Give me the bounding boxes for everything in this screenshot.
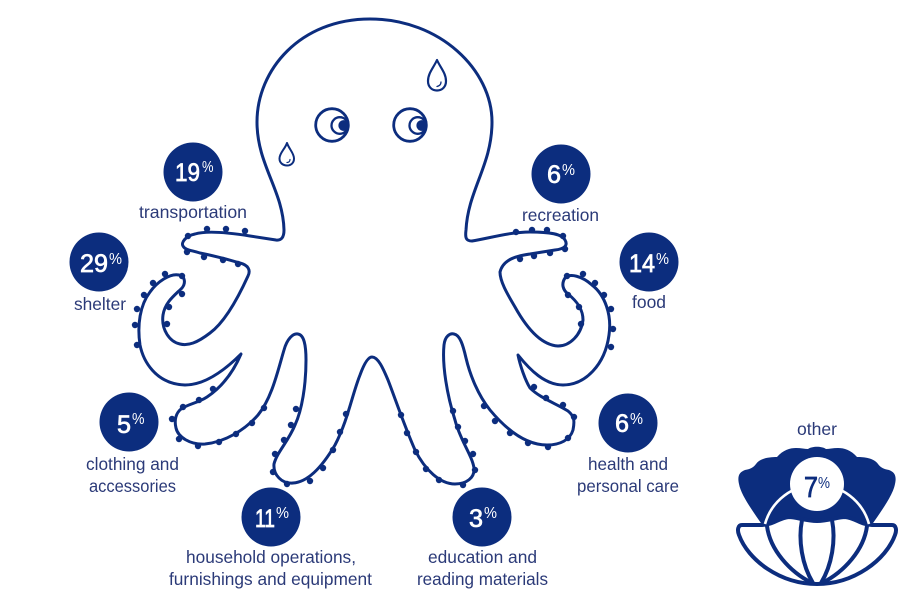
stat: education and reading materials 3% <box>417 488 548 589</box>
stat: household operations 11%: household operations, <box>186 547 356 567</box>
stat: shelter 29% <box>70 232 128 314</box>
octopus illustration <box>132 19 616 488</box>
stat: education and reading materials 3%: reading materials <box>417 569 548 589</box>
stat: food 14%: food <box>632 292 666 312</box>
icon: upper shell <box>738 447 896 527</box>
pearl value 7% <box>804 472 830 504</box>
stat: health and personal care 6%: % <box>630 411 643 428</box>
pearl <box>790 457 844 511</box>
stat: transportation 19%: transportation <box>139 202 247 222</box>
icon: lower shell <box>738 517 896 584</box>
octopus body outline <box>139 19 610 484</box>
stat: health and personal care 6%: health and <box>588 454 668 474</box>
other: clam shell with pearl <box>738 419 896 584</box>
stat: transportation 19%: 19 <box>175 159 200 187</box>
icon: large sweat drop <box>428 60 446 90</box>
stat: household operations 11% <box>169 488 372 589</box>
stat: education and reading materials 3%: 3 <box>469 505 483 533</box>
stat: food 14% <box>620 232 678 312</box>
stat: transportation 19% <box>139 142 247 222</box>
decorative white arc <box>765 485 869 524</box>
stat: education and reading materials 3%: % <box>484 505 497 522</box>
stat: household operations 11%: furnishings and equipment <box>169 569 372 589</box>
stat: health and personal care 6%: 6 <box>615 410 629 438</box>
stat: recreation 6%: 6 <box>547 161 561 189</box>
stat: health and personal care 6%: personal care <box>577 476 679 496</box>
icon: right eye <box>394 109 427 141</box>
stat: household operations 11%: 11 <box>255 505 275 533</box>
stat: recreation 6%: recreation <box>522 205 599 225</box>
stat: clothing and accessories 5%: % <box>132 411 144 428</box>
pearl value 7%: 7 <box>804 472 818 504</box>
stat: shelter 29%: % <box>109 251 122 268</box>
suckers <box>132 226 616 488</box>
stat: shelter 29%: 29 <box>80 250 108 278</box>
stat: food 14%: % <box>656 251 669 268</box>
pearl value 7%: % <box>818 475 830 492</box>
stat: education and reading materials 3%: education and <box>428 547 537 567</box>
stat: household operations 11%: % <box>276 505 289 522</box>
stat: clothing and accessories 5% <box>86 392 179 496</box>
stat: shelter 29%: shelter <box>74 294 126 314</box>
icon: small sweat drop <box>280 143 294 166</box>
icon: left eye <box>316 109 349 141</box>
stat: food 14%: 14 <box>629 250 655 278</box>
stat: clothing and accessories 5%: 5 <box>117 411 131 439</box>
stat: health and personal care 6% <box>577 394 679 496</box>
stat: recreation 6%: % <box>562 162 575 179</box>
stat: transportation 19%: % <box>202 159 214 176</box>
stat: recreation 6% <box>522 144 599 225</box>
stat: clothing and accessories 5%: accessories <box>89 476 176 496</box>
stat: clothing and accessories 5%: clothing and <box>86 454 179 474</box>
label: other: other <box>797 419 837 439</box>
